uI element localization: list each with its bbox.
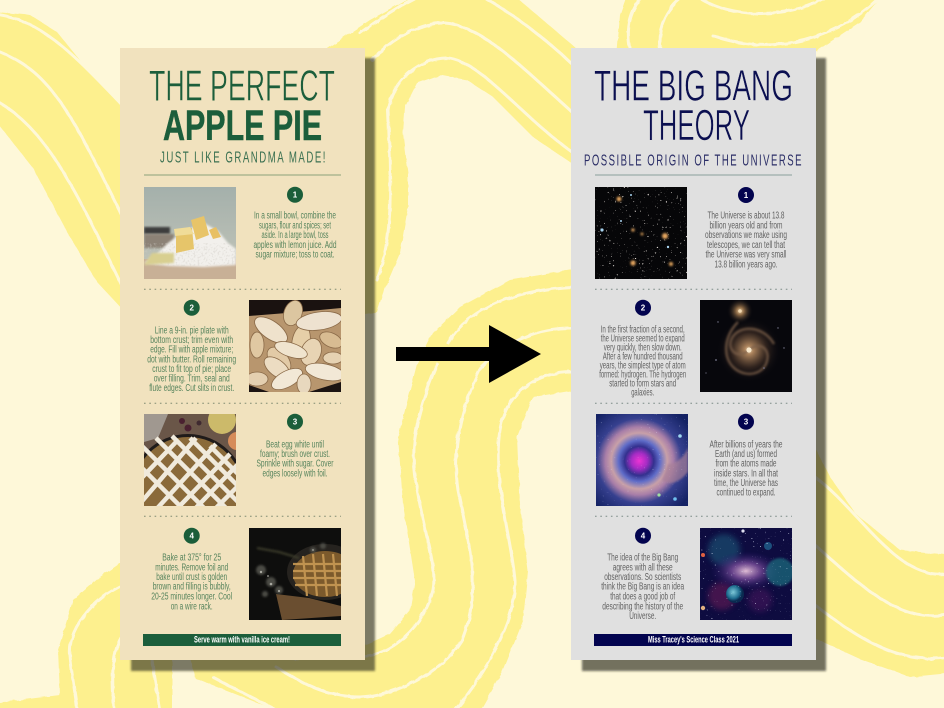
step 4: 20-25 minutes longer. Cool [151,592,232,603]
step 3: Beat egg white until [266,439,324,450]
step 2: very quickly, then slow down. [604,343,682,354]
step 1: billion years old and from [710,220,782,231]
step 4: think the Big Bang is an idea [601,582,684,593]
step 1: apples with lemon juice. Add [254,240,336,251]
step 1: In a small bowl, combine the [254,211,336,222]
panel: the big bang theory [571,48,826,671]
step 3: After billions of years the [710,439,783,450]
step 1 [705,187,787,270]
step 4: that does a good job of [610,592,675,603]
step 4: minutes. Remove foil and [155,562,228,573]
step 4 [601,528,684,622]
step 4: observations. So scientists [604,572,681,583]
title: the big bang theory: THEORY [643,101,750,150]
step 3: inside stars. In all that [714,468,778,479]
step 4: brown and filling is bubbly, [153,582,231,593]
step 4: agrees with all these [613,562,673,573]
title: the big bang theory [594,62,793,150]
step 4: The idea of the Big Bang [607,553,678,564]
step 1: The Universe is about 13.8 [708,211,785,222]
step 2: dot with butter. Roll remaining [147,354,236,365]
step 2: 2 [189,304,194,313]
step 4: bake until crust is golden [156,572,227,583]
step 3 [256,414,334,479]
step 2: flute edges. Cut slits in crust. [149,383,234,394]
step 1 [254,187,336,261]
step 2: edge. Fill with apple mixture; [150,345,233,356]
image: lattice pie [144,414,236,506]
step 2: crust to fit top of pie; place [152,364,231,375]
step 3: 3 [744,418,749,427]
step 2: years, the simplest type of atom [600,361,686,372]
step 4: Bake at 375° for 25 [162,553,221,564]
title: the perfect apple pie: APPLE PIE [163,102,322,150]
step 2: 2 [641,304,646,313]
step 1: telescopes, we can tell that [707,240,785,251]
step 4: on a wire rack. [171,601,213,612]
image: pie on dark table [249,528,341,620]
footer banner [594,634,792,646]
step 1: sugars, flour and spices; set [259,220,331,231]
step 2: the Universe seemed to expand [601,334,685,345]
step 2: After a few hundred thousand [603,352,683,363]
image: whirlpool galaxy [700,300,792,392]
image: colorful galaxy and planets [700,528,792,620]
step 3: time, the Universe has [714,478,778,489]
step 2 [147,300,236,394]
image: apple slices [249,300,341,392]
image: deep field stars [595,187,687,279]
step 3: Sprinkle with sugar. Cover [256,459,334,470]
step 2: bottom crust; trim even with [150,335,233,346]
step 3: foamy; brush over crust. [260,449,330,460]
panel: the perfect apple pie [120,48,375,671]
image: helix nebula [596,414,688,506]
step 1: the Universe was very small [706,250,786,261]
footer banner: Serve warm with vanilla ice cream! [194,635,290,646]
step 1: 1 [293,191,298,200]
step 3: from the atoms made [716,459,777,470]
step 4: 4 [641,532,646,541]
step 2: In the first fraction of a second, [601,325,685,336]
step 2: started to form stars and [609,379,676,390]
step 3: 3 [293,418,298,427]
subtitle: JUST LIKE GRANDMA MADE! [160,149,327,166]
step 4 [151,528,232,612]
footer banner: Miss Tracey's Science Class 2021 [648,634,739,645]
title: the big bang theory: THE BIG BANG [594,62,793,111]
step 2: Line a 9-in. pie plate with [155,325,229,336]
step 1: 1 [744,191,749,200]
image: flour and butter [144,187,236,279]
step 4: 4 [189,532,194,541]
step 2: formed: hydrogen. The hydrogen [599,370,686,381]
step 3: continued to expand. [716,488,776,499]
step 3 [710,414,783,499]
title: the perfect apple pie: THE PERFECT [149,62,335,111]
footer banner [143,634,341,646]
step 2: galaxies. [631,388,654,399]
arrow [396,325,541,383]
step 1: sugar mixture; toss to coat. [256,250,334,261]
step 3: Earth (and us) formed [715,449,777,460]
step 2: over filling. Trim, seal and [154,374,230,385]
subtitle: POSSIBLE ORIGIN OF THE UNIVERSE [584,152,803,169]
step 4: describing the history of the [602,601,683,612]
step 1: 13.8 billion years ago. [714,259,778,270]
step 2 [599,300,686,399]
step 4: Universe. [629,611,656,622]
step 3: edges loosely with foil. [262,468,328,479]
step 1: aside. In a large bowl, toss [262,230,328,241]
title: the perfect apple pie [149,62,335,150]
step 1: observations we make using [705,230,787,241]
